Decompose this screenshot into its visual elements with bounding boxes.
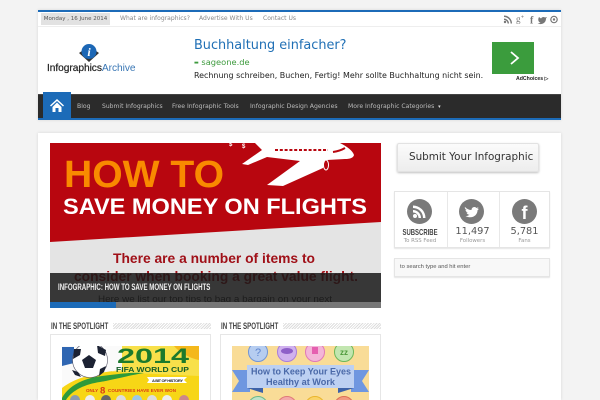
FIFA thumbnail: FIFA WORLD CUP bbox=[116, 365, 189, 374]
ribbon bbox=[232, 370, 369, 392]
featured slider: how to save money on flights bbox=[50, 143, 381, 308]
left post card: FIFA world cup bbox=[50, 334, 211, 400]
nav item: design agencies: Infographic Design Agencies bbox=[250, 103, 338, 110]
home button bbox=[43, 92, 71, 119]
nav item: more categories: More Infographic Categories ▾ bbox=[348, 103, 441, 110]
label: subscribe: SUBSCRIBE bbox=[402, 227, 438, 237]
airplane: $ bbox=[242, 144, 246, 150]
eye health thumbnail: Healthy at Work bbox=[266, 377, 335, 387]
advertisement banner bbox=[194, 38, 549, 82]
slider artwork bbox=[50, 143, 381, 304]
ad url: ▬ sageone.de bbox=[194, 57, 250, 67]
adchoices label: AdChoices ▷ bbox=[516, 76, 549, 82]
date label bbox=[41, 13, 110, 25]
airplane bbox=[229, 142, 354, 186]
slider artwork: SAVE MONEY ON FLIGHTS bbox=[63, 194, 367, 219]
nav item: submit infographics: Submit Infographics bbox=[102, 103, 163, 110]
ad green arrow button bbox=[492, 42, 534, 74]
right section heading bbox=[221, 321, 381, 332]
slider artwork: Here we list our top tips to bag a bargain on your next bbox=[98, 294, 333, 304]
date label: Monday , 16 June 2014 bbox=[44, 16, 107, 22]
submit infographic button bbox=[397, 143, 539, 172]
soccer ball bbox=[72, 342, 108, 378]
ad body text: Rechnung schreiben, Buchen, Fertig! Mehr sollte Buchhaltung nicht sein. bbox=[194, 71, 483, 80]
social icons row bbox=[504, 14, 558, 25]
eye health thumbnail: ? bbox=[255, 347, 261, 359]
ad headline: Buchhaltung einfacher? bbox=[194, 38, 346, 53]
icon: facebook bbox=[512, 199, 537, 224]
slider progress fill bbox=[50, 302, 116, 308]
slider progress bar bbox=[50, 302, 381, 308]
FIFA thumbnail bbox=[62, 346, 199, 400]
left section heading bbox=[51, 321, 211, 332]
eye health thumbnail: zz bbox=[340, 348, 348, 357]
eye health thumbnail bbox=[232, 346, 369, 400]
top navigation bar bbox=[38, 10, 561, 27]
sublabel: to RSS feed: To RSS Feed bbox=[404, 238, 436, 244]
search box bbox=[394, 258, 550, 277]
icon: home bbox=[50, 99, 64, 112]
top menu link: advertise: Advertise With Us bbox=[199, 15, 253, 22]
icon: twitter bbox=[459, 199, 484, 224]
heading text: IN THE SPOTLIGHT bbox=[221, 321, 278, 332]
icon: RSS bbox=[407, 199, 432, 224]
nav item: blog: Blog bbox=[77, 103, 91, 110]
social counters widget bbox=[394, 191, 550, 248]
FIFA thumbnail: ONLY bbox=[86, 388, 98, 393]
page header card bbox=[38, 10, 561, 120]
FIFA thumbnail: COUNTRIES HAVE EVER WON bbox=[108, 388, 176, 393]
number: twitter followers: 11,497 bbox=[455, 226, 490, 237]
sublabel: fans: Fans bbox=[518, 238, 531, 244]
social icons row: g bbox=[516, 14, 521, 24]
logo icon: diamond with info mark bbox=[79, 44, 99, 62]
icon: facebook: f bbox=[522, 203, 528, 223]
main navigation bar bbox=[38, 94, 561, 120]
top menu link: contact: Contact Us bbox=[263, 15, 296, 22]
FIFA thumbnail: 8 bbox=[100, 386, 105, 396]
slider artwork: HOW TO bbox=[64, 154, 224, 196]
slider caption text: INFOGRAPHIC: HOW TO SAVE MONEY ON FLIGHTS bbox=[58, 282, 210, 292]
heading text: IN THE SPOTLIGHT bbox=[51, 321, 108, 332]
right post card: eyes healthy at work bbox=[220, 334, 381, 400]
slider artwork: There are a number of items to bbox=[113, 251, 315, 266]
number: facebook fans: 5,781 bbox=[510, 226, 539, 237]
counter: twitter followers bbox=[447, 192, 500, 247]
slider artwork: consider when booking a great value flight. bbox=[74, 269, 358, 284]
logo: Infographics Archive bbox=[47, 44, 136, 74]
social icons row: + bbox=[521, 14, 524, 20]
counter: RSS subscribe bbox=[395, 192, 448, 247]
top menu link: what are infographics: What are infographics? bbox=[120, 15, 190, 22]
logo wordmark: InfographicsArchive bbox=[47, 63, 136, 74]
heading stripes bbox=[113, 323, 211, 329]
submit infographic button: Submit Your Infographic bbox=[409, 151, 533, 163]
heading stripes bbox=[283, 323, 381, 329]
sublabel: followers: Followers bbox=[460, 238, 485, 244]
FIFA thumbnail: A BIT OF HISTORY bbox=[152, 378, 183, 383]
main content card bbox=[38, 133, 561, 400]
slider caption overlay bbox=[50, 273, 381, 308]
nav item: free tools: Free Infographic Tools bbox=[172, 103, 239, 110]
logo icon: diamond with info mark: i bbox=[87, 45, 91, 59]
counter: facebook fans bbox=[510, 199, 539, 244]
search box: to search type and hit enter bbox=[400, 264, 470, 270]
eye health thumbnail: How to Keep Your Eyes bbox=[251, 366, 351, 376]
